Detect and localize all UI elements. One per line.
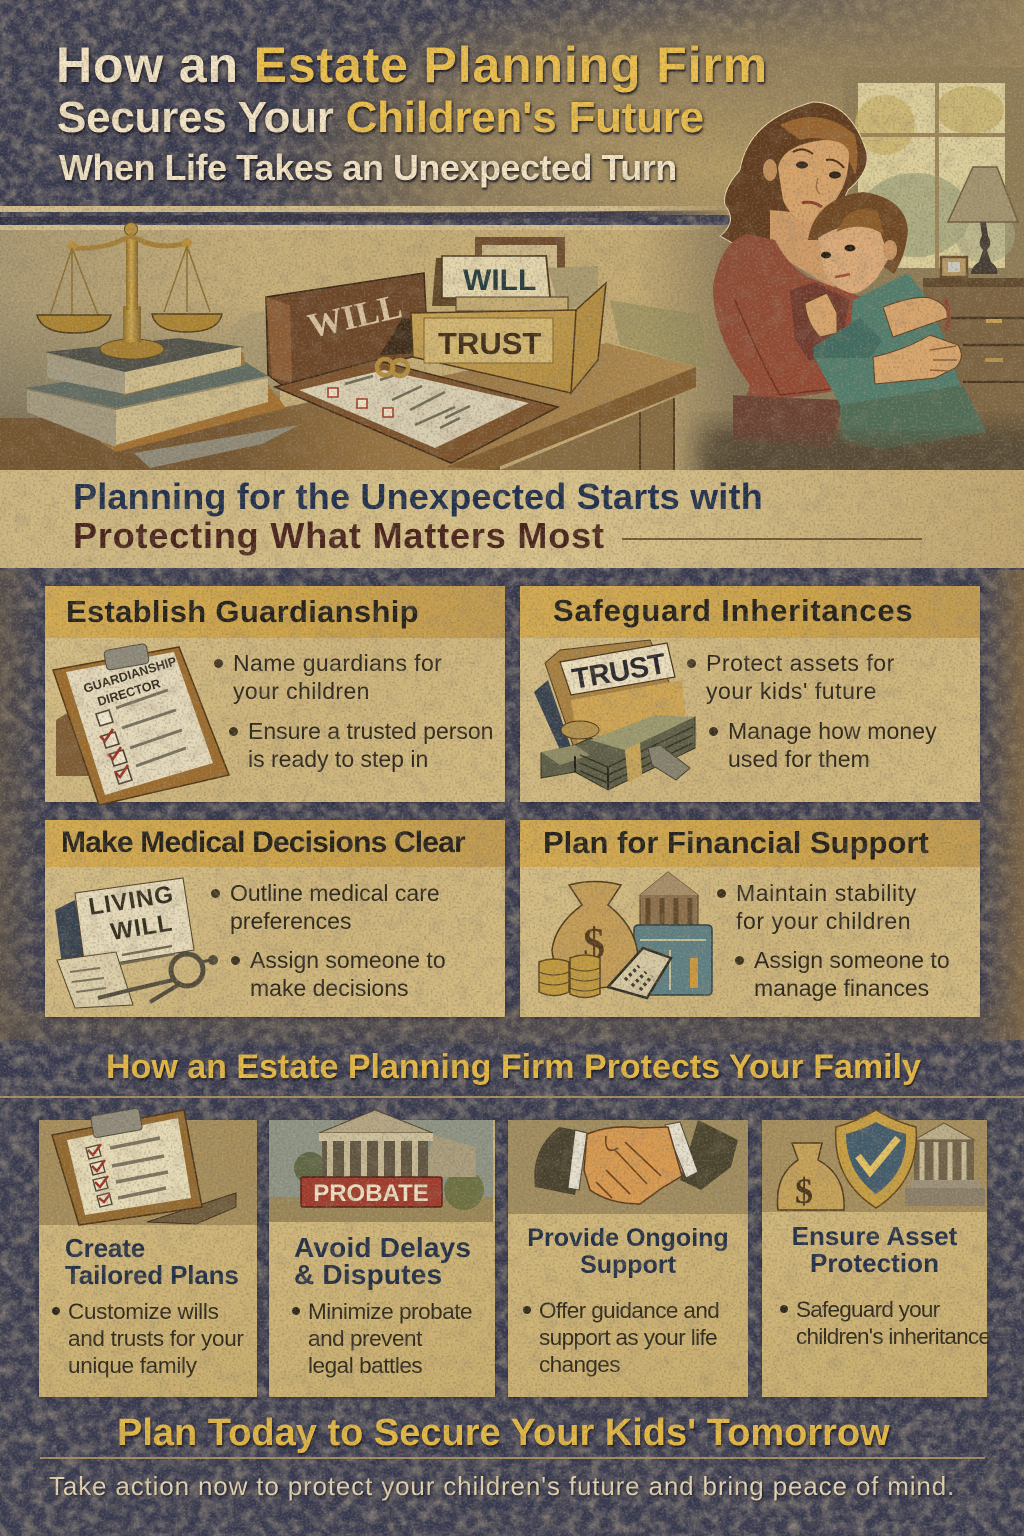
icon: scales and books	[24, 222, 299, 468]
icon: trust box with will folder	[411, 237, 606, 393]
card text: changes	[539, 1352, 620, 1377]
card text: Safeguard your	[796, 1297, 939, 1322]
panel: safeguard inheritances	[520, 586, 980, 802]
icon: living will and stethoscope: LIVING	[87, 881, 176, 921]
icon: guardianship clipboard: GUARDIANSHIP	[82, 654, 178, 696]
panel: medical decisions	[45, 820, 505, 1017]
panel heading: Plan for Financial Support	[543, 825, 929, 860]
panel: establish guardianship	[45, 586, 505, 802]
bullet list: Ensure a trusted person	[248, 718, 493, 744]
card text	[52, 1233, 244, 1378]
icon: trust box with will folder: TRUST	[438, 326, 541, 361]
hero illustration	[0, 67, 1024, 470]
closing line: Take action now to protect your children's future and bring peace of mind.	[49, 1471, 955, 1501]
bullet list: make decisions	[250, 975, 409, 1001]
panel heading: Safeguard Inheritances	[553, 593, 913, 628]
icon: living will and stethoscope: WILL	[109, 909, 175, 946]
bullet list: Maintain stability	[736, 880, 917, 906]
icon: trust folder and money	[534, 640, 696, 790]
icon: trust folder and money: TRUST	[570, 648, 669, 696]
bullet list: Outline medical care	[230, 880, 440, 906]
card text: & Disputes	[294, 1259, 442, 1290]
card text: and prevent	[308, 1326, 422, 1351]
card text: Minimize probate	[308, 1299, 472, 1324]
icon: checklist document	[275, 359, 558, 463]
panel: financial support	[520, 820, 980, 1017]
mother body	[713, 234, 875, 440]
panel heading	[520, 586, 980, 638]
panel: provide ongoing support	[508, 1120, 748, 1397]
panel: create tailored plans	[39, 1120, 257, 1397]
icon: will binder	[266, 273, 428, 388]
window and lamp	[843, 67, 1024, 470]
card text: Ensure Asset	[792, 1221, 957, 1251]
hands	[805, 293, 837, 337]
panel heading: Make Medical Decisions Clear	[61, 826, 465, 859]
mother hair	[720, 102, 867, 250]
call to action heading: Plan Today to Secure Your Kids' Tomorrow	[117, 1412, 890, 1454]
bullet list	[211, 880, 446, 1001]
illustration: mother and child	[713, 102, 987, 450]
bullet list: your children	[233, 678, 370, 704]
image panel	[269, 1110, 493, 1222]
bullet list: Manage how money	[728, 718, 937, 744]
card text: children's inheritance	[796, 1324, 990, 1349]
card text: Avoid Delays	[294, 1232, 471, 1263]
bullet list: used for them	[728, 746, 870, 772]
bullet list: preferences	[230, 908, 351, 934]
bullet list: manage finances	[754, 975, 929, 1001]
panel heading	[45, 820, 505, 867]
card text: Create	[65, 1233, 145, 1263]
icon: guardianship clipboard	[52, 644, 230, 806]
icon: living will and stethoscope	[55, 877, 218, 1008]
image panel	[508, 1120, 748, 1214]
banner: planning for the unexpected	[0, 470, 1024, 568]
banner heading: Protecting What Matters Most	[73, 515, 605, 556]
image panel: PROBATE	[313, 1180, 429, 1207]
bullet list: your kids' future	[706, 678, 877, 704]
icon: money bag, bank and calculator	[538, 872, 713, 1000]
bullet list: is ready to step in	[248, 746, 428, 772]
child hair	[808, 192, 908, 274]
image panel	[39, 1108, 257, 1226]
icon: trust box with will folder: WILL	[463, 264, 536, 297]
card text: legal battles	[308, 1353, 422, 1378]
panel heading	[45, 586, 505, 638]
icon: money bag, bank and calculator: $	[583, 919, 605, 968]
bullet list	[687, 650, 937, 772]
title: Secures Your Children's Future	[57, 93, 704, 142]
title	[56, 37, 768, 192]
card text: unique family	[68, 1353, 197, 1378]
card text	[523, 1224, 729, 1377]
card text: Provide Ongoing	[527, 1224, 729, 1252]
panel: avoid delays and disputes	[269, 1120, 495, 1397]
floor fade over figures	[715, 440, 1015, 490]
bullet list: Assign someone to	[754, 947, 950, 973]
floor shadow	[700, 425, 1024, 495]
mother face	[778, 140, 849, 223]
hero backdrop	[0, 206, 1024, 470]
bullet list: Name guardians for	[233, 650, 442, 676]
card text	[292, 1232, 472, 1378]
card text: Offer guidance and	[539, 1298, 719, 1323]
title: When Life Takes an Unexpected Turn	[59, 147, 677, 188]
image panel: $	[795, 1171, 813, 1211]
banner heading: Planning for the Unexpected Starts with	[73, 476, 763, 517]
mother neck	[770, 210, 835, 290]
card text: Support	[580, 1251, 676, 1279]
child body	[813, 273, 987, 440]
desk	[230, 343, 696, 470]
card text: and trusts for your	[68, 1326, 244, 1351]
banner heading	[73, 476, 763, 556]
card text: Protection	[810, 1248, 939, 1278]
panel: ensure asset protection	[762, 1120, 987, 1397]
bullet list	[214, 650, 493, 772]
icon: guardianship clipboard: DIRECTOR	[96, 676, 162, 709]
section heading: how a firm protects: How an Estate Planning Firm Protects Your Family	[106, 1048, 921, 1086]
card text	[780, 1221, 990, 1349]
image panel	[762, 1109, 987, 1212]
panel heading	[520, 820, 980, 867]
bullet list: Protect assets for	[706, 650, 895, 676]
bullet list: for your children	[736, 908, 911, 934]
child face	[818, 225, 889, 293]
card text: Tailored Plans	[65, 1260, 239, 1290]
panel heading: Establish Guardianship	[66, 594, 419, 629]
title: How an Estate Planning Firm	[56, 37, 768, 93]
card text: Customize wills	[68, 1299, 219, 1324]
bullet list	[717, 880, 950, 1001]
card text: support as your life	[539, 1325, 717, 1350]
bullet list: Assign someone to	[250, 947, 446, 973]
icon: will binder: WILL	[304, 286, 406, 346]
